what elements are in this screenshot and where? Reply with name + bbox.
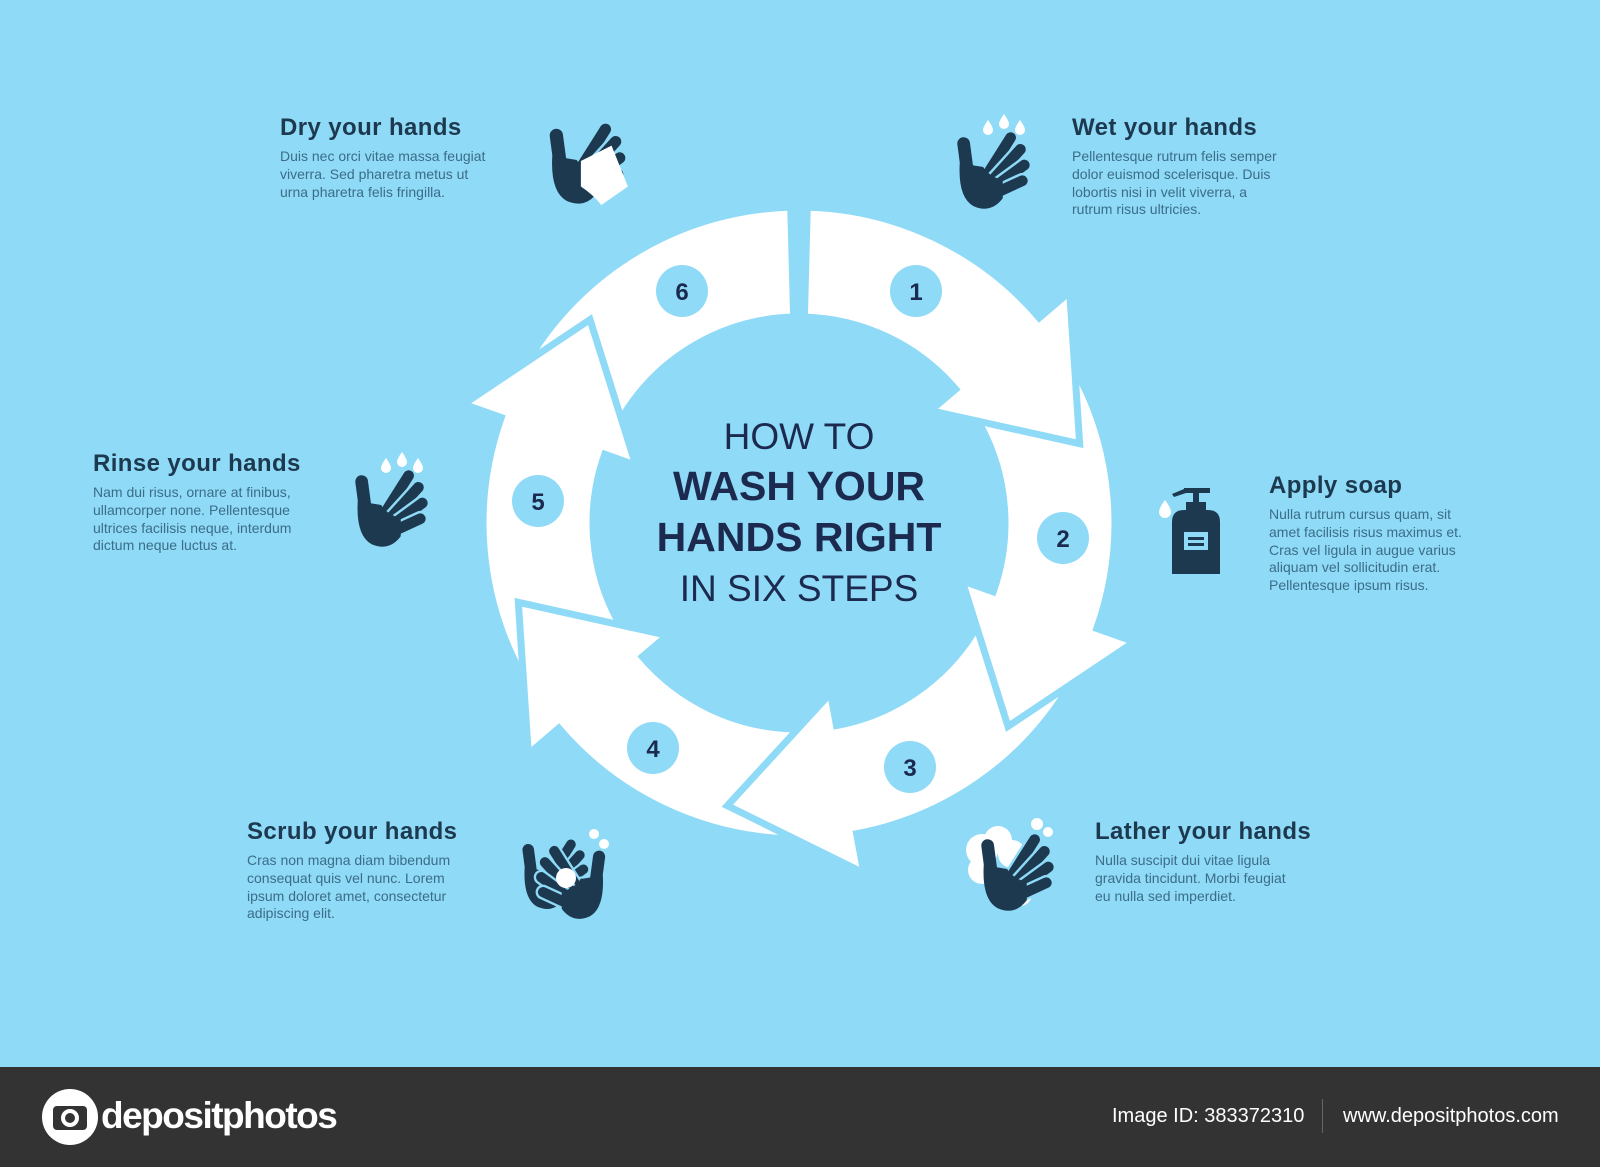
arrow segment 3 <box>727 568 1068 926</box>
title: HANDS RIGHT <box>657 514 941 560</box>
icon: soap dispenser <box>1159 488 1220 574</box>
title <box>657 416 941 609</box>
text: apply soap <box>1269 472 1462 593</box>
text: apply soap: Cras vel ligula in augue varius <box>1269 542 1456 558</box>
text: scrub your hands: consequat quis vel nunc. Lorem <box>247 870 445 886</box>
icon: hand with water drops <box>957 114 1030 209</box>
text: apply soap: amet facilisis risus maximus et. <box>1269 524 1462 540</box>
footer url: www.depositphotos.com <box>1343 1105 1559 1127</box>
text: dry your hands <box>280 114 486 200</box>
text: dry your hands: urna pharetra felis fringilla. <box>280 184 445 200</box>
arrow segment 2 <box>875 372 1210 726</box>
text: rinse your hands: Rinse your hands <box>93 450 301 477</box>
text: rinse your hands: ultrices facilisis neque, interdum <box>93 520 291 536</box>
text: dry your hands: Duis nec orci vitae massa feugiat <box>280 148 485 164</box>
arrow segment 6 <box>530 132 842 464</box>
text: wet your hands <box>1072 114 1277 217</box>
arrow segment 1 <box>801 207 1086 444</box>
footer logo: depositphotos <box>101 1095 336 1136</box>
footer bar <box>0 1067 1600 1167</box>
footer logo <box>42 1089 336 1145</box>
text: lather your hands: eu nulla sed imperdiet. <box>1095 888 1236 904</box>
arrow segment 4 <box>512 602 797 839</box>
arrow segment 5 <box>388 320 723 674</box>
number 4 <box>627 722 679 774</box>
icon: scrubbing hands <box>522 829 609 919</box>
text: lather your hands <box>1095 818 1311 904</box>
text: wet your hands: dolor euismod scelerisque. Duis <box>1072 166 1270 182</box>
title: WASH YOUR <box>673 463 925 509</box>
text: scrub your hands: adipiscing elit. <box>247 905 335 921</box>
text: scrub your hands: Cras non magna diam bibendum <box>247 852 450 868</box>
text: rinse your hands: Nam dui risus, ornare at finibus, <box>93 484 291 500</box>
text: wet your hands: Pellentesque rutrum felis semper <box>1072 148 1277 164</box>
text: scrub your hands: Scrub your hands <box>247 818 457 845</box>
text: lather your hands: gravida tincidunt. Morbi feugiat <box>1095 870 1286 886</box>
title: IN SIX STEPS <box>680 568 918 609</box>
text: apply soap: Nulla rutrum cursus quam, sit <box>1269 506 1451 522</box>
footer image id: Image ID: 383372310 <box>1112 1105 1304 1127</box>
icon: hand rinse <box>355 452 428 547</box>
text: wet your hands: rutrum risus ultricies. <box>1072 201 1201 217</box>
text: dry your hands: Dry your hands <box>280 114 462 141</box>
icon: lather hand with foam <box>966 818 1054 911</box>
text: apply soap: aliquam vel sollicitudin erat. <box>1269 559 1440 575</box>
number 6: 6 <box>675 279 689 306</box>
text: lather your hands: Nulla suscipit dui vitae ligula <box>1095 852 1270 868</box>
text: apply soap: Pellentesque ipsum risus. <box>1269 577 1429 593</box>
number 1: 1 <box>909 279 923 306</box>
text: dry your hands: viverra. Sed pharetra metus ut <box>280 166 468 182</box>
text: wet your hands: lobortis nisi in velit viverra, a <box>1072 184 1247 200</box>
number 2: 2 <box>1056 526 1070 553</box>
number 2 <box>1037 512 1089 564</box>
number 4: 4 <box>646 736 660 763</box>
number 6 <box>656 265 708 317</box>
number 5 <box>512 475 564 527</box>
text: wet your hands: Wet your hands <box>1072 114 1257 141</box>
number 1 <box>890 265 942 317</box>
text: scrub your hands: ipsum doloret amet, consectetur <box>247 888 446 904</box>
number 5: 5 <box>531 489 545 516</box>
icon: hand with towel <box>550 124 628 205</box>
text: rinse your hands <box>93 450 301 553</box>
text: apply soap: Apply soap <box>1269 472 1402 499</box>
text: rinse your hands: ullamcorper none. Pellentesque <box>93 502 290 518</box>
number 3: 3 <box>903 755 917 782</box>
text: scrub your hands <box>247 818 457 921</box>
title: HOW TO <box>724 416 874 457</box>
text: lather your hands: Lather your hands <box>1095 818 1311 845</box>
number 3 <box>884 741 936 793</box>
text: rinse your hands: dictum neque luctus at. <box>93 537 237 553</box>
